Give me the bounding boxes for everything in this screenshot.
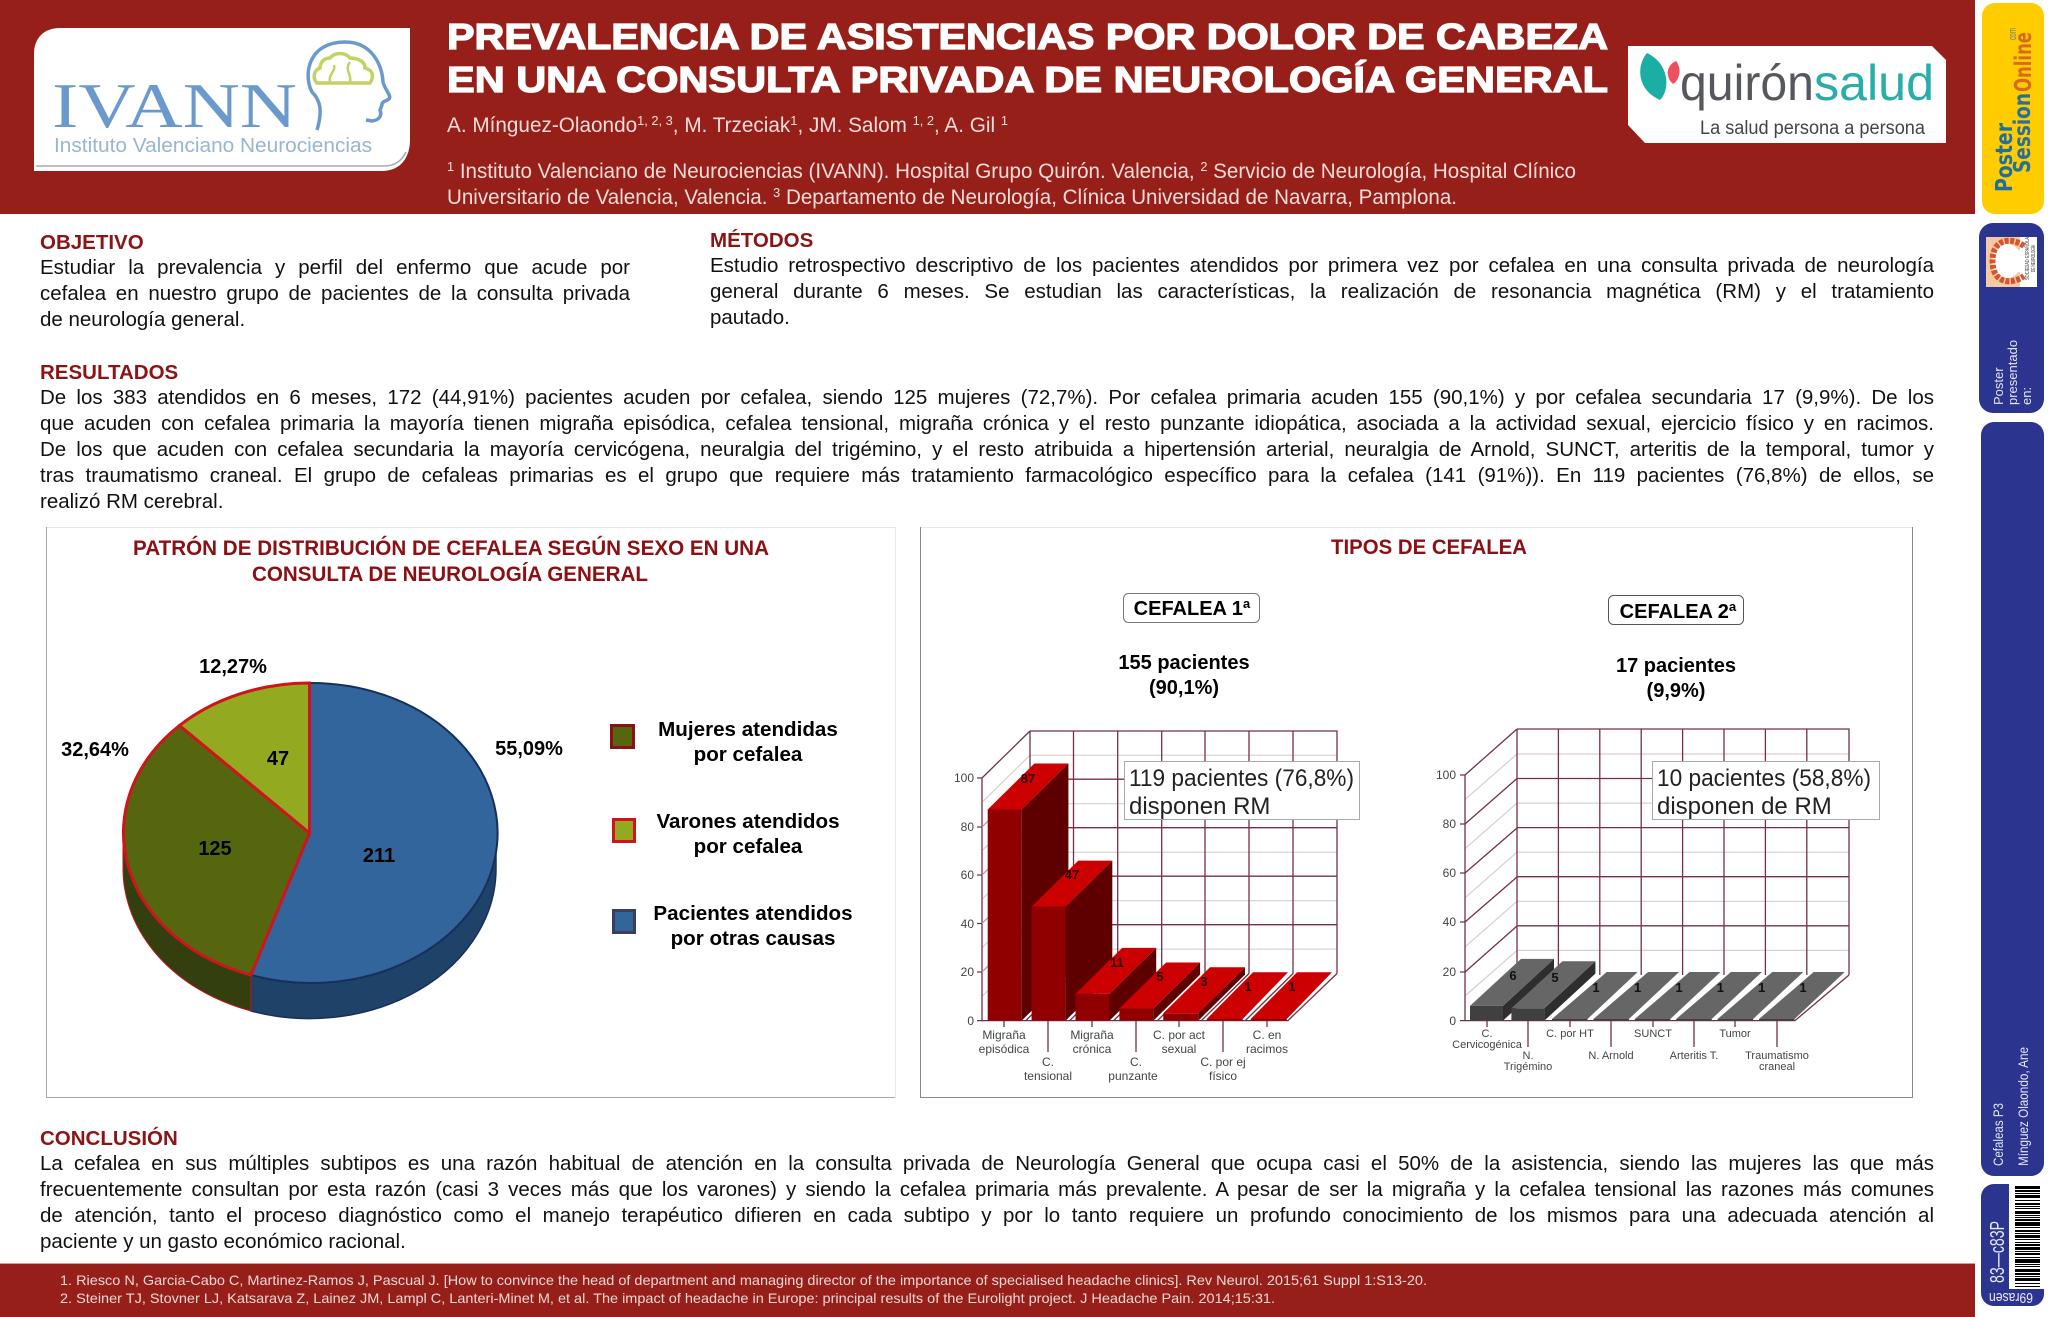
text block: métodos [710,229,1934,329]
pie [61,656,563,1019]
legend: Varones atendidos [656,810,840,833]
text block: métodos: general durante 6 meses. Se estudian las características, la realización de resonancia magnética (RM) y el tratamiento [710,280,1934,303]
bar chart: cefalea primaria: episódica [979,1042,1030,1056]
panel: pie chart [46,527,896,1098]
title: PREVALENCIA DE ASISTENCIAS POR DOLOR DE CABEZA [447,16,1608,57]
label: cefalea primaria: 155 pacientes [1118,652,1250,674]
bar chart: cefalea primaria: C. por act [1153,1028,1206,1042]
pie: 55,09% [495,738,563,760]
bar chart: cefalea secundaria: 100 [1436,768,1456,782]
text block: resultados: tras traumatismo craneal. El grupo de cefaleas primarias es el grupo que requiere más tratamiento farmacológico específico para la cefalea (141 (91%)). En 119 pacientes (76,8%) de ellos, se [40,464,1934,487]
callout: RM cefalea primaria: disponen RM [1129,793,1270,820]
authors: 1 [790,113,797,128]
icon: society logo: DE NEUROLOGÍA [2030,245,2037,272]
text block: resultados: realizó RM cerebral. [40,490,223,513]
affiliations: Instituto Valenciano de Neurociencias (IVANN). Hospital Grupo Quirón. Valencia, [454,160,1200,183]
legend [612,718,853,950]
label: cefalea secundaria: CEFALEA 2ª [1620,601,1737,623]
footer band with references: 1. Riesco N, Garcia-Cabo C, Martinez-Ramos J, Pascual J. [How to convince the head of department and managing director of the importance of specialised headache clinics]. Rev Neurol. 2015;61 Suppl 1:S13-20. [60,1272,1427,1288]
label: cefalea primaria: (90,1%) [1149,677,1219,699]
bar chart: cefalea primaria: 1 [1244,979,1252,994]
pie: 32,64% [61,739,129,761]
sidebar: PosterSessionOnline logo: Poster [1992,122,2018,192]
bar chart: cefalea secundaria: 1 [1799,980,1807,995]
logo: IVANN: Instituto Valenciano Neurociencias [54,135,372,157]
bar chart: cefalea primaria: sexual [1162,1042,1196,1056]
icon: society logo [1986,236,2037,287]
sidebar: poster presentado en: presentado [2005,340,2020,405]
bar chart: cefalea secundaria: C. [1482,1028,1492,1040]
logo: quirónsalud: La salud persona a persona [1700,118,1925,139]
bar chart: cefalea primaria: tensional [1024,1069,1072,1083]
label: cefalea secundaria [1608,596,1744,702]
bar chart: cefalea secundaria: 1 [1675,980,1683,995]
text block: conclusión: frecuentemente consultan por esta razón (casi 3 veces más que los varones) y siendo la cefalea primaria más prevalente. A pesar de ser la migraña y la cefalea tensional las razones más comunes [40,1178,1934,1201]
authors: A. Mínguez-Olaondo [447,114,640,137]
panel heading: TIPOS DE CEFALEA [1331,536,1527,559]
legend: Pacientes atendidos [653,902,853,925]
text block: conclusión: La cefalea en sus múltiples subtipos es una razón habitual de atención en la consulta privada de Neurología General que ocupa casi el 50% de la asistencia, siendo las mujeres las que más [40,1152,1934,1175]
affiliations: 1 [447,159,454,174]
bar chart: cefalea secundaria: SUNCT [1634,1028,1672,1040]
bar chart: cefalea secundaria: N. [1522,1050,1534,1062]
sidebar: barcode code: 83—c83P [1987,1221,2009,1283]
chart title [133,536,769,586]
label: cefalea primaria [1118,594,1260,699]
bar chart: cefalea primaria: C. en [1253,1028,1281,1042]
text block: métodos: pautado. [710,306,790,329]
text block: conclusión [40,1126,1934,1253]
bar chart: cefalea secundaria: 5 [1551,970,1559,985]
text block: conclusión: de atención, tanto el proceso diagnóstico como el manejo terapéutico difieren en cada subtipo y por lo tanto requiere un profundo conocimiento de los mismos para una adecuada atención al [40,1204,1934,1227]
sidebar: poster presentado en [1979,223,2044,413]
text block: resultados [40,361,1934,513]
text block: resultados: RESULTADOS [40,361,178,384]
chart title: CONSULTA DE NEUROLOGÍA GENERAL [252,563,648,586]
bar chart: cefalea secundaria: 20 [1443,965,1456,979]
bar chart: cefalea secundaria: Traumatismo [1745,1050,1809,1062]
bar chart: cefalea secundaria [1436,729,1880,1073]
bar chart: cefalea secundaria: 80 [1443,817,1456,831]
bar chart: cefalea secundaria: C. por HT [1546,1028,1594,1040]
bar chart: cefalea primaria: Migraña [982,1028,1026,1042]
bar chart: cefalea primaria: 5 [1156,969,1164,984]
label: cefalea secundaria: (9,9%) [1647,680,1705,702]
bar chart: cefalea secundaria: 1 [1758,980,1765,995]
affiliations: 3 [773,185,780,200]
bar chart: cefalea primaria: 0 [967,1014,974,1028]
bar chart: cefalea secundaria: Tumor [1719,1028,1751,1040]
bar chart: cefalea primaria: 60 [961,868,974,882]
footer band with references: 2. Steiner TJ, Stovner LJ, Katsarava Z, Lainez JM, Lampl C, Lanteri-Minet M, et al. The impact of headache in Europe: principal results of the Eurolight project. J Headache Pain. 2014;15:31. [60,1290,1275,1306]
bar chart: cefalea primaria: 20 [961,965,974,979]
sidebar: barcode code: 69rasen [1989,1289,2033,1305]
text block: resultados: De los que acuden con cefalea secundaria la mayoría cervicógena, neuralgia del trigémino, y el resto atribuida a hipertensión arterial, neuralgia de Arnold, SUNCT, arteritis de la temporal, tumor y [40,438,1934,461]
bar chart: cefalea primaria: C. [1042,1055,1054,1069]
sidebar: PosterSessionOnline logo: Online [2011,32,2037,92]
bar chart: cefalea secundaria: 0 [1449,1014,1456,1028]
text block: conclusión: paciente y un gasto económico racional. [40,1230,406,1253]
bar chart: cefalea secundaria: N. Arnold [1588,1050,1634,1062]
bar chart: cefalea primaria: crónica [1073,1042,1112,1056]
logo: quirónsalud: quirón [1680,55,1814,111]
text block: métodos: MÉTODOS [710,229,813,252]
bar chart: cefalea primaria: racimos [1246,1042,1288,1056]
callout: RM cefalea primaria: 119 pacientes (76,8%) [1129,765,1354,792]
logo: quirónsalud [1628,46,1946,143]
bar chart: cefalea primaria: punzante [1108,1069,1158,1083]
text block: resultados: De los 383 atendidos en 6 meses, 172 (44,91%) pacientes acuden por cefalea, siendo 125 mujeres (72,7%). Por cefalea primaria acuden 155 (90,1%) y por cefalea secundaria 17 (9,9%). De los [40,386,1934,409]
bar chart: cefalea secundaria: Arteritis T. [1670,1050,1718,1062]
authors: , A. Gil [934,114,1001,137]
logo: IVANN: IVANN [52,70,297,141]
legend: por cefalea [694,835,803,858]
bar chart: cefalea primaria: 87 [1021,771,1035,786]
text block: resultados: que acuden con cefalea primaria la mayoría tienen migraña episódica, cefalea tensional, migraña crónica y el resto punzante idiopática, asociada a la actividad sexual, ejercicio físico y en racimos. [40,412,1934,435]
authors: 1 [1001,113,1008,128]
icon: head outline with brain [308,42,390,130]
bar chart: cefalea secundaria: 60 [1443,866,1456,880]
bar chart: cefalea primaria: 100 [954,771,974,785]
text block: objetivo: cefalea en nuestro grupo de pacientes de la consulta privada [40,282,630,305]
authors: 1, 2, 3 [637,113,673,128]
title [447,16,1608,100]
sidebar: PosterSessionOnline logo [1982,3,2044,214]
bar chart: cefalea secundaria: 6 [1509,968,1517,983]
pie: 211 [363,845,395,867]
bar chart: cefalea primaria: C. [1130,1055,1142,1069]
label: cefalea secundaria: 17 pacientes [1616,655,1736,677]
panel: tipos de cefalea [920,527,1912,1098]
bar chart: cefalea primaria [954,731,1360,1083]
authors: 1, 2 [913,113,934,128]
bar chart: cefalea primaria: 3 [1200,974,1208,989]
bar chart: cefalea primaria: 47 [1065,867,1079,882]
pie: 125 [198,838,232,860]
icon: teal and pink leaves [1640,53,1680,100]
sidebar: session and author [1981,422,2044,1176]
text block: conclusión: CONCLUSIÓN [40,1127,178,1150]
sidebar: PosterSessionOnline logo: com [2007,28,2019,40]
pie: 47 [267,748,289,770]
bar chart: cefalea secundaria: Cervicogénica [1452,1039,1523,1051]
bar chart: cefalea secundaria: craneal [1759,1061,1795,1073]
authors: , JM. Salom [797,114,913,137]
text block: objetivo: de neurología general. [40,308,245,331]
bar chart: cefalea primaria: C. por ej [1200,1055,1246,1069]
logo: quirónsalud: salud [1814,55,1934,111]
sidebar: session and author: Cefaleas P3 [1990,1103,2006,1166]
bar chart: cefalea primaria: Migraña [1070,1028,1114,1042]
affiliations [447,159,1576,209]
affiliations: 2 [1200,159,1207,174]
sidebar: barcode code [1981,1184,2044,1306]
bar chart: cefalea secundaria: 1 [1592,980,1600,995]
text block: métodos: Estudio retrospectivo descriptivo de los pacientes atendidos por primera vez por cefalea en una consulta privada de neurología [710,254,1934,277]
bar chart: cefalea secundaria: 40 [1443,915,1456,929]
bar chart: cefalea primaria: 40 [961,917,974,931]
legend: por otras causas [671,927,835,950]
pie: 12,27% [199,656,267,678]
sidebar: poster presentado en: en: [2019,387,2034,405]
bar chart: cefalea primaria: 1 [1288,979,1296,994]
sidebar: PosterSessionOnline logo: Session [2010,93,2036,173]
callout: RM cefalea primaria [1124,762,1360,820]
text block: objetivo: Estudiar la prevalencia y perfil del enfermo que acude por [40,256,630,279]
legend: por cefalea [694,743,803,766]
icon: society logo: SOCIEDAD ESPAÑOLA [2024,236,2031,280]
bar chart: cefalea primaria: 80 [961,820,974,834]
title: EN UNA CONSULTA PRIVADA DE NEUROLOGÍA GENERAL [447,59,1608,100]
footer band with references [0,1263,1975,1317]
affiliations: Servicio de Neurología, Hospital Clínico [1207,160,1576,183]
callout: RM cefalea secundaria [1652,762,1880,820]
header band [0,0,1975,214]
text block: objetivo [40,231,630,331]
label: cefalea primaria: CEFALEA 1ª [1134,598,1251,620]
callout: RM cefalea secundaria: 10 pacientes (58,8%) [1657,765,1871,792]
bar chart: cefalea secundaria: 1 [1634,980,1641,995]
chart title: PATRÓN DE DISTRIBUCIÓN DE CEFALEA SEGÚN SEXO EN UNA [133,536,769,560]
sidebar: session and author: Mínguez Olaondo, Ane [2016,1047,2031,1166]
affiliations: Universitario de Valencia, Valencia. [447,186,774,209]
bar chart: cefalea primaria: físico [1209,1069,1237,1083]
authors: , M. Trzeciak [673,114,791,137]
callout: RM cefalea secundaria: disponen de RM [1657,793,1832,820]
bar chart: cefalea secundaria: 1 [1717,980,1724,995]
affiliations: Departamento de Neurología, Clínica Universidad de Navarra, Pamplona. [780,186,1457,209]
bar chart: cefalea primaria: 11 [1110,955,1124,970]
legend: Mujeres atendidas [658,718,838,741]
barcode [2015,1186,2040,1287]
logo: IVANN [34,28,410,171]
bar chart: cefalea secundaria: Trigémino [1504,1061,1552,1073]
sidebar: poster presentado en: Poster [1991,367,2006,405]
text block: objetivo: OBJETIVO [40,231,144,254]
